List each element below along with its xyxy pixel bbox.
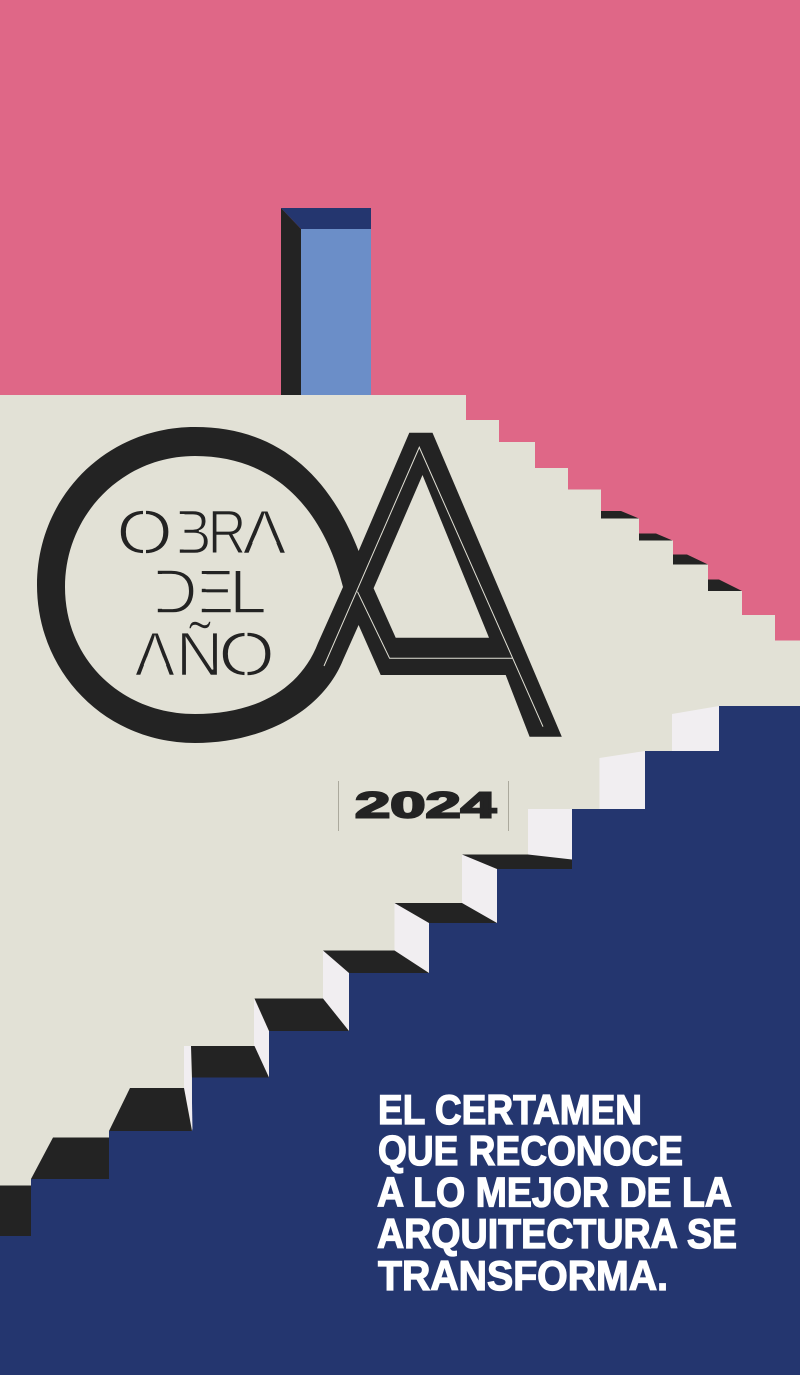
wordmark: OBRA DEL AÑO: Ñ xyxy=(176,620,223,689)
wordmark: OBRA DEL AÑO: A xyxy=(135,619,175,688)
wordmark: OBRA DEL AÑO: O xyxy=(218,620,275,689)
wordmark: OBRA DEL AÑO: B xyxy=(175,498,211,567)
headline text: TRANSFORMA. xyxy=(378,1252,668,1299)
headline text: QUE RECONOCE xyxy=(378,1127,683,1174)
headline text xyxy=(377,1086,737,1299)
icon: blue doorway xyxy=(281,208,371,396)
logo: OA monogram with wordmark xyxy=(37,427,562,743)
wordmark: OBRA DEL AÑO: O xyxy=(116,498,173,567)
headline text: ARQUITECTURA SE xyxy=(377,1210,737,1257)
wordmark: OBRA DEL AÑO: R xyxy=(208,499,246,567)
navy lower staircase xyxy=(0,706,800,1375)
icon: OA monogram xyxy=(37,427,562,743)
headline text: A LO MEJOR DE LA xyxy=(377,1168,732,1216)
wordmark: OBRA DEL AÑO: L xyxy=(229,557,267,626)
panel: cream staircase wall xyxy=(0,395,800,1236)
wordmark: OBRA DEL AÑO: D xyxy=(152,558,197,627)
lower stair treads xyxy=(0,854,572,1236)
wordmark: OBRA DEL AÑO xyxy=(116,498,287,689)
wordmark: OBRA DEL AÑO: E xyxy=(196,558,234,627)
headline text: EL CERTAMEN xyxy=(378,1086,642,1133)
year label with dividers: 2024 xyxy=(355,784,496,826)
lower stair risers xyxy=(184,706,719,1131)
wordmark: OBRA DEL AÑO: A xyxy=(243,498,287,567)
upper dark stair treads xyxy=(601,511,742,591)
